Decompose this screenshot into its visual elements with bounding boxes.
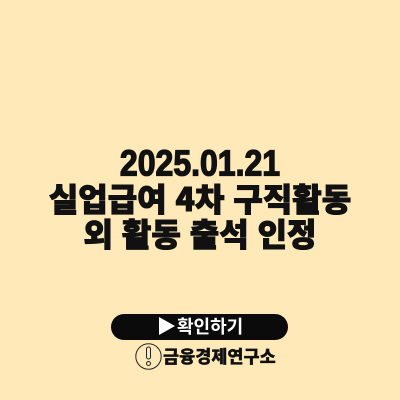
brand logo: [135, 343, 276, 370]
title line: subject: 실업급여 4차 구직활동: [49, 175, 351, 221]
brand name: 금융경제연구소: [163, 344, 276, 369]
button label: 확인하기: [177, 313, 243, 339]
icon: exclamation circle: [135, 343, 162, 370]
title: [49, 143, 351, 256]
title line: date: 2025.01.21: [120, 143, 280, 183]
button: confirm: [111, 314, 288, 340]
icon: play triangle: [159, 317, 175, 335]
title line: detail: 외 활동 출석 인정: [84, 210, 316, 256]
